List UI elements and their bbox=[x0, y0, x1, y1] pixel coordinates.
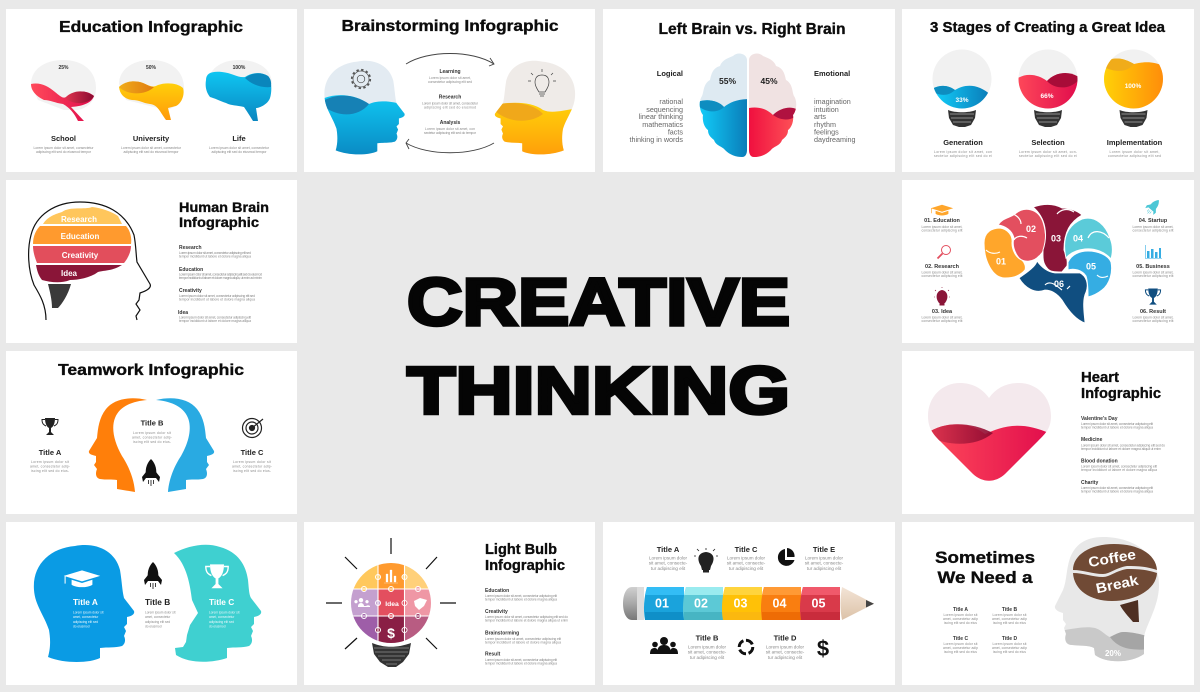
hemisphere: left: 55% bbox=[719, 76, 736, 86]
text: emotional list: daydreaming bbox=[814, 135, 856, 144]
region 01 bbox=[984, 228, 1025, 278]
brain: life: 100% bbox=[233, 65, 246, 71]
text: heart items: Valentine's Day bbox=[1081, 416, 1118, 422]
text: title B: do eiusmod bbox=[145, 624, 162, 628]
labels: stages: sectetur adipiscing elit sed do ei bbox=[934, 154, 992, 158]
text: title B: Title B bbox=[696, 634, 719, 642]
hemisphere: right: 45% bbox=[760, 76, 778, 86]
head: gold with bulb bbox=[494, 60, 575, 154]
text: logical list: rational bbox=[659, 97, 683, 106]
text: title A: amet, consectetur adip- bbox=[30, 464, 70, 468]
heading: human brain: Infographic bbox=[179, 214, 259, 230]
text: title C bbox=[232, 448, 272, 473]
main title: creative thinking: THINKING bbox=[407, 353, 790, 428]
puzzle bulb bbox=[351, 563, 431, 643]
text: learning research analysis: Lorem ipsum dolor sit amet, consectetur bbox=[422, 102, 479, 106]
text: brain items: tempor incididunt ut labore et dolore magna aliqua bbox=[179, 319, 251, 323]
text: bulb items: Education bbox=[485, 588, 509, 594]
text: title B bbox=[132, 418, 172, 444]
text: title B: sit amet, consecte- bbox=[688, 650, 727, 654]
heading: teamwork: Teamwork Infographic bbox=[58, 362, 244, 379]
labels: stages: Lorem ipsum dolor sit amet, con bbox=[934, 150, 992, 154]
text: title B: Lorem ipsum dolor sit bbox=[133, 431, 171, 435]
text: emotional list: arts bbox=[814, 112, 826, 121]
icon: trophy bbox=[1145, 288, 1161, 305]
bulb: implementation 100%: 100% bbox=[1125, 83, 1142, 90]
heading: heart: Heart bbox=[1081, 369, 1119, 386]
text: right items: consectetur adipiscing elit bbox=[1132, 228, 1174, 232]
icon: chart bbox=[1146, 245, 1162, 258]
head: blue with gear bbox=[324, 60, 405, 154]
text: left items: 02. Research bbox=[925, 264, 960, 270]
head: blue title A: Lorem ipsum dolor sit bbox=[73, 610, 104, 614]
text: heart items: Lorem ipsum dolor sit amet, consectetur adipiscing elit bbox=[1081, 464, 1157, 468]
text: title A bbox=[649, 545, 688, 571]
text: title E bbox=[805, 545, 844, 571]
head: blue title A: do eiusmod bbox=[73, 624, 90, 628]
text: title D: Title D bbox=[774, 634, 797, 642]
text: titles A to D bbox=[943, 607, 1027, 654]
segment 02 bbox=[683, 587, 723, 620]
text: titles A to D: iscing elit sed do eius bbox=[993, 621, 1026, 625]
puzzle icons: Idea bbox=[385, 601, 399, 608]
text: heart items: tempor incididunt ut labore et dolore magna aliqua ut enim bbox=[1081, 447, 1161, 451]
text: right items: consectetur adipiscing elit bbox=[1132, 274, 1174, 278]
heading: light bulb bbox=[485, 542, 565, 574]
bulb: selection 66%: 66% bbox=[1040, 93, 1054, 100]
text: learning research analysis: sectetur adipiscing elit sed do tempor bbox=[424, 131, 477, 135]
text: bulb items: Lorem ipsum dolor sit amet, consectetur adipiscing elit bbox=[485, 658, 557, 662]
brain: university: 50% bbox=[146, 65, 157, 71]
region 02: 02 bbox=[1026, 224, 1036, 234]
panel: heart infographic bbox=[902, 351, 1194, 514]
icon: rocket bbox=[1143, 196, 1163, 217]
region 06 bbox=[1019, 261, 1087, 323]
text: bulb items: Lorem ipsum dolor sit amet, consectetur adipiscing elit bbox=[485, 594, 557, 598]
text: learning research analysis: Research bbox=[439, 94, 461, 100]
head: teal title C: do eiusmod bbox=[209, 624, 226, 628]
text: title C: Title C bbox=[735, 545, 758, 554]
head with coffee bean bbox=[1055, 537, 1159, 665]
region 01: 01 bbox=[996, 256, 1006, 266]
icon: rocket bbox=[144, 562, 162, 589]
text: heart items: tempor incididunt ut labore et dolore magna aliqua bbox=[1081, 468, 1157, 472]
panel: light bulb infographic bbox=[304, 522, 595, 685]
text: title D: tur adipiscing elit bbox=[768, 655, 803, 660]
main title: creative thinking: CREATIVE bbox=[407, 265, 790, 340]
region 06: 06 bbox=[1054, 279, 1064, 289]
labels: school university life: Life bbox=[232, 134, 246, 143]
text: titles A to D: Title C bbox=[953, 636, 968, 642]
text: title C: Lorem ipsum dolor sit bbox=[233, 460, 271, 464]
head outline bbox=[29, 202, 150, 320]
text: titles A to D: iscing elit sed do eius bbox=[944, 621, 977, 625]
panel: two heads bbox=[6, 522, 297, 685]
text: learning research analysis: Analysis bbox=[440, 120, 460, 126]
segment 04: 04 bbox=[773, 596, 786, 610]
layer: idea bbox=[36, 265, 122, 282]
heart bbox=[928, 383, 1051, 481]
text: heart items: tempor incididunt ut labore et dolore magna aliqua bbox=[1081, 490, 1153, 494]
head with coffee bean: 20% bbox=[1105, 649, 1121, 658]
segment 04 bbox=[761, 587, 801, 620]
panel: brain with six regions bbox=[902, 180, 1194, 343]
region 04: 04 bbox=[1073, 234, 1083, 244]
text: left items: 03. Idea bbox=[932, 309, 953, 315]
main title: creative thinking bbox=[407, 265, 790, 428]
text: brain items: Lorem ipsum dolor sit amet, consectetur adipiscing elit sed bbox=[179, 294, 255, 298]
text: left items: consectetur adipiscing elit bbox=[922, 319, 963, 323]
labels: stages: Implementation bbox=[1107, 138, 1163, 147]
text: brain items: Education bbox=[179, 267, 203, 273]
region 05 bbox=[1068, 251, 1112, 297]
panel: brainstorming infographic bbox=[304, 9, 595, 172]
text: titles A to D: Lorem ipsum dolor sit bbox=[992, 613, 1027, 617]
text: emotional list: imagination bbox=[814, 97, 851, 106]
bulb: generation 33%: 33% bbox=[955, 97, 969, 104]
layer: creativity bbox=[33, 246, 131, 263]
text: titles A to D: iscing elit sed do eius bbox=[993, 650, 1026, 654]
text: learning research analysis: adipiscing elit sed do eiusmod bbox=[424, 106, 476, 110]
brain stem bbox=[48, 284, 71, 308]
labels: school university life: School bbox=[51, 134, 76, 143]
text: right items: consectetur adipiscing elit bbox=[1132, 319, 1174, 323]
segment 03: 03 bbox=[734, 596, 747, 610]
text: titles A to D: amet, consectetur adip bbox=[943, 646, 978, 650]
text: heart items: Lorem ipsum dolor sit amet, consectetur adipiscing elit bbox=[1081, 486, 1153, 490]
text: brain items: Idea bbox=[178, 310, 188, 316]
text: title B: Title B bbox=[141, 418, 164, 428]
labels: stages bbox=[934, 138, 1163, 158]
text: brain items: Lorem ipsum dolor sit amet, consectetur adipiscing elit sed do eiusmod bbox=[179, 272, 262, 276]
head: orange bbox=[89, 398, 147, 492]
labels: school university life: Lorem ipsum dolor sit amet, consectetur bbox=[121, 146, 182, 150]
arrow: top bbox=[406, 54, 494, 66]
head: blue title A: adipiscing elit sed bbox=[73, 620, 98, 624]
text: right items: Lorem ipsum dolor sit amet, bbox=[1132, 316, 1174, 320]
layer: education: Education bbox=[61, 232, 99, 241]
text: left items bbox=[922, 218, 963, 323]
text: title C: Lorem ipsum dolor bbox=[727, 556, 765, 560]
icon: people bbox=[650, 637, 678, 654]
text: learning research analysis: Lorem ipsum dolor sit amet, bbox=[429, 76, 471, 80]
text: title A: tur adipiscing elit bbox=[651, 566, 686, 571]
text: learning research analysis: consectetur adipiscing elit sed bbox=[428, 80, 472, 84]
text: title B: iscing elit sed do eius- bbox=[133, 440, 171, 444]
text: learning research analysis bbox=[422, 69, 479, 135]
text: title C: iscing elit sed do eius- bbox=[233, 469, 271, 473]
text: title B: amet, consectetur bbox=[145, 615, 171, 619]
text: emotional list: Emotional bbox=[814, 69, 850, 78]
text: title E: Lorem ipsum dolor bbox=[805, 556, 843, 560]
icon: trophy bbox=[42, 418, 58, 435]
text: title A: Lorem ipsum dolor sit bbox=[31, 460, 69, 464]
text: right items: Lorem ipsum dolor sit amet, bbox=[1132, 270, 1174, 274]
brain: school bbox=[31, 60, 96, 121]
labels: school university life: adipiscing elit sed do eiusmod tempor bbox=[212, 150, 267, 154]
text: brain items: Research bbox=[179, 245, 202, 251]
labels: school university life: Lorem ipsum dolor sit amet, consectetur bbox=[34, 146, 94, 150]
text: title A: sit amet, consecte- bbox=[649, 560, 688, 566]
text: heart items: Charity bbox=[1081, 480, 1098, 486]
text: title B: Lorem ipsum dolor bbox=[688, 644, 726, 650]
text: left items: 01. Education bbox=[924, 218, 961, 224]
text: bulb items: Creativity bbox=[485, 609, 508, 615]
icon: pie bbox=[778, 548, 795, 566]
segment 01 bbox=[644, 587, 684, 620]
text: heart items: Lorem ipsum dolor sit amet, consectetur adipiscing elit sed do bbox=[1081, 444, 1165, 448]
panel: teamwork infographic bbox=[6, 351, 297, 514]
text: right items: Lorem ipsum dolor sit amet, bbox=[1132, 225, 1174, 229]
text: titles A to D: amet, consectetur adip bbox=[992, 646, 1027, 650]
heading: brainstorming: Brainstorming Infographic bbox=[342, 18, 559, 35]
layer: research bbox=[43, 207, 122, 224]
heading: human brain bbox=[179, 199, 269, 230]
text: title B: Lorem ipsum dolor sit bbox=[145, 610, 176, 614]
pencil bbox=[623, 587, 874, 620]
puzzle icons: $ bbox=[387, 625, 395, 641]
text: titles A to D: iscing elit sed do eius bbox=[944, 650, 977, 654]
text: title A: Lorem ipsum dolor bbox=[649, 556, 687, 560]
text: titles A to D: amet, consectetur adip bbox=[943, 617, 978, 621]
text: title D bbox=[766, 634, 805, 660]
head: blue bbox=[156, 398, 214, 492]
labels: school university life: Lorem ipsum dolor sit amet, consectetur bbox=[209, 146, 270, 150]
text: bulb items: Lorem ipsum dolor sit amet, consectetur adipiscing elit bbox=[485, 637, 561, 641]
icon: bulb bbox=[694, 548, 718, 572]
icon: ring bbox=[739, 640, 753, 654]
text: bulb items bbox=[485, 588, 568, 666]
text: left items: Lorem ipsum dolor sit amet, bbox=[922, 316, 963, 320]
text: bulb items: Brainstorming bbox=[485, 630, 519, 636]
head: blue title A: Title A bbox=[73, 597, 98, 607]
text: title C: Title C bbox=[241, 448, 264, 457]
arrow: bottom bbox=[406, 139, 494, 153]
text: heart items: Blood donation bbox=[1081, 458, 1118, 464]
text: title C bbox=[727, 545, 766, 571]
text: learning research analysis: Learning bbox=[439, 69, 461, 75]
segment 05 bbox=[800, 587, 840, 620]
segment 02: 02 bbox=[694, 596, 708, 610]
text: logical list: mathematics bbox=[642, 120, 683, 129]
text: title B: adipiscing elit sed bbox=[145, 620, 170, 624]
text: heart items: Lorem ipsum dolor sit amet, consectetur adipiscing elit bbox=[1081, 422, 1153, 426]
bulb: generation 33% bbox=[930, 50, 992, 127]
heading: heart bbox=[1081, 369, 1161, 402]
text: title A: iscing elit sed do eius- bbox=[31, 469, 69, 473]
text: titles A to D: amet, consectetur adip bbox=[992, 617, 1027, 621]
text: learning research analysis: Lorem ipsum dolor sit amet, con bbox=[425, 127, 475, 131]
text: bulb items: tempor incididunt ut labore et dolore magna aliqua bbox=[485, 598, 557, 602]
region 05: 05 bbox=[1086, 262, 1096, 272]
text: title E: sit amet, consecte- bbox=[805, 560, 844, 566]
text: title B: tur adipiscing elit bbox=[690, 655, 725, 660]
layer: idea: Idea bbox=[61, 269, 78, 278]
text: brain items: Creativity bbox=[179, 288, 202, 294]
region 02 bbox=[998, 209, 1046, 261]
head: teal title C: Lorem ipsum dolor sit bbox=[209, 610, 240, 614]
labels: stages: consectetur adipiscing elit sed bbox=[1108, 154, 1161, 158]
text: title A: Title A bbox=[39, 448, 62, 457]
heading: light bulb: Infographic bbox=[485, 558, 565, 574]
text: heart items: tempor incididunt ut labore et dolore magna aliqua bbox=[1081, 426, 1153, 430]
icon: idea bbox=[934, 287, 950, 306]
head: teal title C: Title C bbox=[209, 597, 234, 607]
heading: education: Education Infographic bbox=[59, 19, 243, 36]
labels: school university life: adipiscing elit sed do eiusmod tempor bbox=[36, 150, 92, 154]
text: emotional list: feelings bbox=[814, 128, 839, 136]
text: logical list: sequencing bbox=[646, 105, 683, 114]
brain: life bbox=[206, 60, 272, 121]
text: title C: sit amet, consecte- bbox=[727, 560, 766, 566]
text: emotional list: intuition bbox=[814, 105, 839, 114]
text: emotional list bbox=[814, 69, 856, 144]
heading: sometimes we need a: Sometimes bbox=[935, 549, 1035, 567]
text: brain items: Lorem ipsum dolor sit amet, consectetur adipiscing elit bbox=[179, 316, 251, 320]
text: titles A to D: Lorem ipsum dolor sit bbox=[944, 642, 978, 646]
text: title C: tur adipiscing elit bbox=[729, 566, 764, 571]
text: title B bbox=[145, 597, 176, 628]
text: titles A to D: Title D bbox=[1002, 636, 1017, 642]
text: bulb items: tempor incididunt ut labore et dolore magna aliqua ut enim bbox=[485, 618, 568, 622]
segment 01: 01 bbox=[655, 596, 669, 610]
text: emotional list: rhythm bbox=[814, 120, 836, 129]
bulb base bbox=[372, 643, 411, 667]
labels: stages: Selection bbox=[1031, 138, 1065, 147]
icon: rocket bbox=[142, 459, 160, 486]
panel: 3 stages of creating a great idea bbox=[902, 9, 1194, 172]
hemisphere: left bbox=[700, 54, 747, 157]
text: titles A to D: Title A bbox=[953, 607, 968, 613]
text: brain items: Lorem ipsum dolor sit amet, consectetur adipiscing elit sed bbox=[179, 251, 251, 255]
text: title A: Title A bbox=[657, 545, 680, 554]
text: title B: amet, consectetur adip- bbox=[132, 436, 172, 440]
panel: coffee break bbox=[902, 522, 1194, 685]
text: bulb items: Lorem ipsum dolor sit amet, consectetur adipiscing elit sed do bbox=[485, 615, 568, 619]
heading: sometimes we need a: We Need a bbox=[938, 569, 1033, 587]
icon: target bbox=[242, 418, 263, 438]
text: brain items: tempor incididunt ut labore et dolore magna aliqua bbox=[179, 298, 255, 302]
brain: university bbox=[119, 60, 184, 120]
brain: school: 25% bbox=[58, 65, 69, 71]
text: title B: Title B bbox=[145, 597, 170, 607]
region 03 bbox=[1033, 204, 1082, 272]
icon: dollar: $ bbox=[817, 636, 829, 661]
heading: sometimes we need a bbox=[935, 549, 1035, 587]
hemisphere: right bbox=[749, 53, 800, 160]
heading: human brain: Human Brain bbox=[179, 199, 269, 215]
text: logical list: Logical bbox=[657, 69, 683, 78]
text: logical list: facts bbox=[668, 128, 683, 136]
text: titles A to D: Title B bbox=[1002, 607, 1017, 613]
heading: left vs right: Left Brain vs. Right Brain bbox=[658, 21, 846, 38]
head: blue title A bbox=[34, 545, 134, 662]
text: title D: Lorem ipsum dolor bbox=[766, 644, 804, 650]
panel: human brain infographic bbox=[6, 180, 297, 343]
rays bbox=[326, 538, 456, 649]
labels: school university life: adipiscing elit sed do eiusmod tempor bbox=[124, 150, 179, 154]
text: left items: consectetur adipiscing elit bbox=[922, 228, 963, 232]
labels: school university life: University bbox=[133, 134, 170, 143]
icon: magnifier bbox=[938, 246, 950, 258]
text: right items: 05. Business bbox=[1136, 264, 1170, 270]
segment 03 bbox=[722, 587, 762, 620]
panel: education infographic bbox=[6, 9, 297, 172]
segment 05: 05 bbox=[812, 596, 825, 610]
text: bulb items: Result bbox=[485, 652, 501, 658]
text: bulb items: tempor incididunt ut labore et dolore magna aliqua bbox=[485, 662, 557, 666]
text: title C: amet, consectetur adip- bbox=[232, 464, 272, 468]
panel: pencil timeline bbox=[603, 522, 895, 685]
text: brain items bbox=[178, 245, 262, 323]
head: teal title C bbox=[174, 545, 261, 662]
text: logical list: linear thinking bbox=[639, 112, 683, 121]
text: logical list: thinking in words bbox=[629, 135, 683, 144]
text: heart items: Medicine bbox=[1081, 437, 1103, 443]
labels: stages: sectetur adipiscing elit sed do ei bbox=[1019, 154, 1077, 158]
puzzle icons bbox=[354, 570, 427, 641]
head: teal title C: adipiscing elit sed bbox=[209, 620, 234, 624]
text: brain items: tempor incididunt ut labore et dolore magna aliqua, ut enim ad minim bbox=[179, 276, 262, 280]
head with coffee bean: Break bbox=[1094, 572, 1140, 596]
heading: heart: Infographic bbox=[1081, 385, 1161, 402]
head: teal title C: amet, consectetur bbox=[209, 615, 235, 619]
text: right items: 06. Result bbox=[1140, 309, 1166, 315]
icon: cap bbox=[931, 205, 953, 215]
layer: education bbox=[33, 226, 131, 244]
text: left items: Lorem ipsum dolor sit amet, bbox=[922, 225, 963, 229]
text: brain items: tempor incididunt ut labore et dolore magna aliqua bbox=[179, 254, 251, 258]
labels: stages: Generation bbox=[943, 138, 983, 147]
labels: stages: Lorem ipsum dolor sit amet, bbox=[1110, 150, 1160, 154]
text: title D: sit amet, consecte- bbox=[766, 650, 805, 654]
bulb: implementation 100% bbox=[1104, 50, 1163, 127]
text: right items bbox=[1132, 218, 1174, 323]
layer: research: Research bbox=[61, 215, 97, 224]
text: left items: consectetur adipiscing elit bbox=[922, 274, 963, 278]
text: title B bbox=[688, 634, 727, 660]
labels: stages: Lorem ipsum dolor sit amet, con- bbox=[1019, 150, 1077, 154]
bulb: selection 66% bbox=[1015, 50, 1080, 127]
text: titles A to D: Lorem ipsum dolor sit bbox=[944, 613, 978, 617]
panel: left brain vs right brain bbox=[603, 9, 895, 172]
text: titles A to D: Lorem ipsum dolor sit bbox=[992, 642, 1027, 646]
text: title A bbox=[30, 448, 70, 473]
text: title E: Title E bbox=[813, 545, 835, 554]
text: heart items bbox=[1081, 416, 1165, 494]
head: blue title A: amet, consectetur bbox=[73, 615, 99, 619]
region 03: 03 bbox=[1051, 234, 1061, 244]
labels: school university life bbox=[34, 134, 270, 154]
head with coffee bean: Coffee bbox=[1087, 546, 1137, 570]
region 04 bbox=[1065, 218, 1112, 259]
heading: light bulb: Light Bulb bbox=[485, 542, 557, 558]
text: bulb items: tempor incididunt ut labore et dolore magna aliqua bbox=[485, 640, 561, 644]
layer: creativity: Creativity bbox=[62, 251, 99, 260]
text: logical list bbox=[629, 69, 683, 144]
heading: 3 stages: 3 Stages of Creating a Great Idea bbox=[930, 19, 1166, 36]
text: left items: Lorem ipsum dolor sit amet, bbox=[922, 270, 963, 274]
text: title E: tur adipiscing elit bbox=[807, 566, 842, 571]
text: right items: 04. Startup bbox=[1139, 218, 1168, 224]
